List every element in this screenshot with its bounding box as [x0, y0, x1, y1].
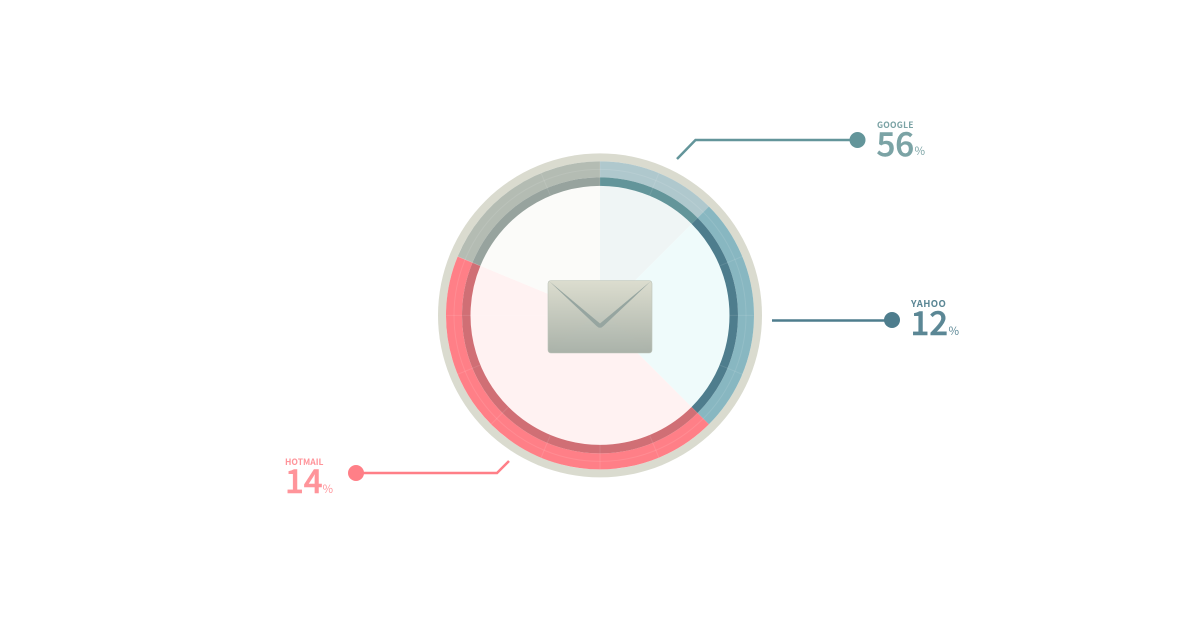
label: GOOGLE [877, 119, 914, 131]
callout: yahoo [772, 296, 960, 345]
dot [850, 132, 866, 148]
outer ring [438, 153, 762, 477]
outer band segments [454, 169, 746, 461]
donut chart [438, 153, 762, 477]
dot [348, 465, 364, 481]
icon: envelope [548, 280, 652, 353]
value: 12 [910, 297, 948, 345]
percent sign: % [914, 143, 926, 159]
value: 14 [285, 455, 323, 503]
leader line [772, 319, 892, 322]
label: HOTMAIL [285, 456, 324, 468]
leader line [356, 461, 509, 473]
percent sign: % [948, 323, 960, 339]
inner wedges [446, 161, 754, 469]
callout: google [677, 118, 926, 166]
percent sign: % [322, 481, 334, 497]
value: 56 [876, 118, 914, 166]
dot [884, 312, 900, 328]
callout: hotmail [285, 455, 509, 503]
label: YAHOO [910, 296, 946, 310]
leader line [677, 140, 857, 159]
dark ring segments [466, 182, 734, 449]
